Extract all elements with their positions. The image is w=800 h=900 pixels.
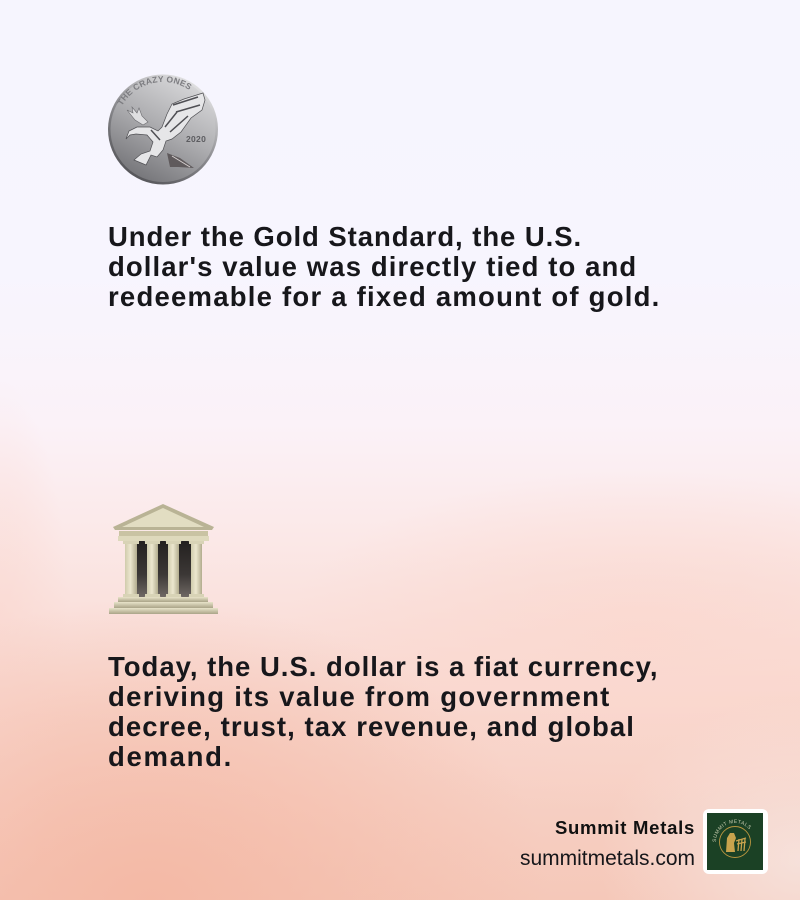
text block: fiat currency: demand. bbox=[108, 741, 233, 772]
logo: Summit Metals badge: SUMMIT METALS bbox=[712, 820, 752, 842]
text block: gold standard: dollar's value was directly tied to and bbox=[108, 251, 637, 282]
text block: fiat currency: decree, trust, tax revenue, and global bbox=[108, 711, 635, 742]
brand name: Summit Metals bbox=[555, 817, 695, 838]
icon: silver eagle coin: THE CRAZY ONES bbox=[117, 76, 192, 104]
text block: fiat currency: deriving its value from government bbox=[108, 681, 611, 712]
website url: summitmetals.com bbox=[520, 847, 695, 870]
text block: fiat currency: Today, the U.S. dollar is a fiat currency, bbox=[108, 651, 658, 682]
text block: gold standard: Under the Gold Standard, the U.S. bbox=[108, 221, 582, 252]
text block: gold standard bbox=[108, 221, 661, 312]
text block: gold standard: redeemable for a fixed amount of gold. bbox=[108, 281, 661, 312]
logo: Summit Metals badge bbox=[703, 809, 768, 874]
icon: silver eagle coin: 2020 bbox=[186, 134, 206, 144]
text block: fiat currency bbox=[108, 651, 658, 772]
icon: classical bank building bbox=[109, 504, 218, 614]
icon: silver eagle coin bbox=[108, 74, 218, 184]
